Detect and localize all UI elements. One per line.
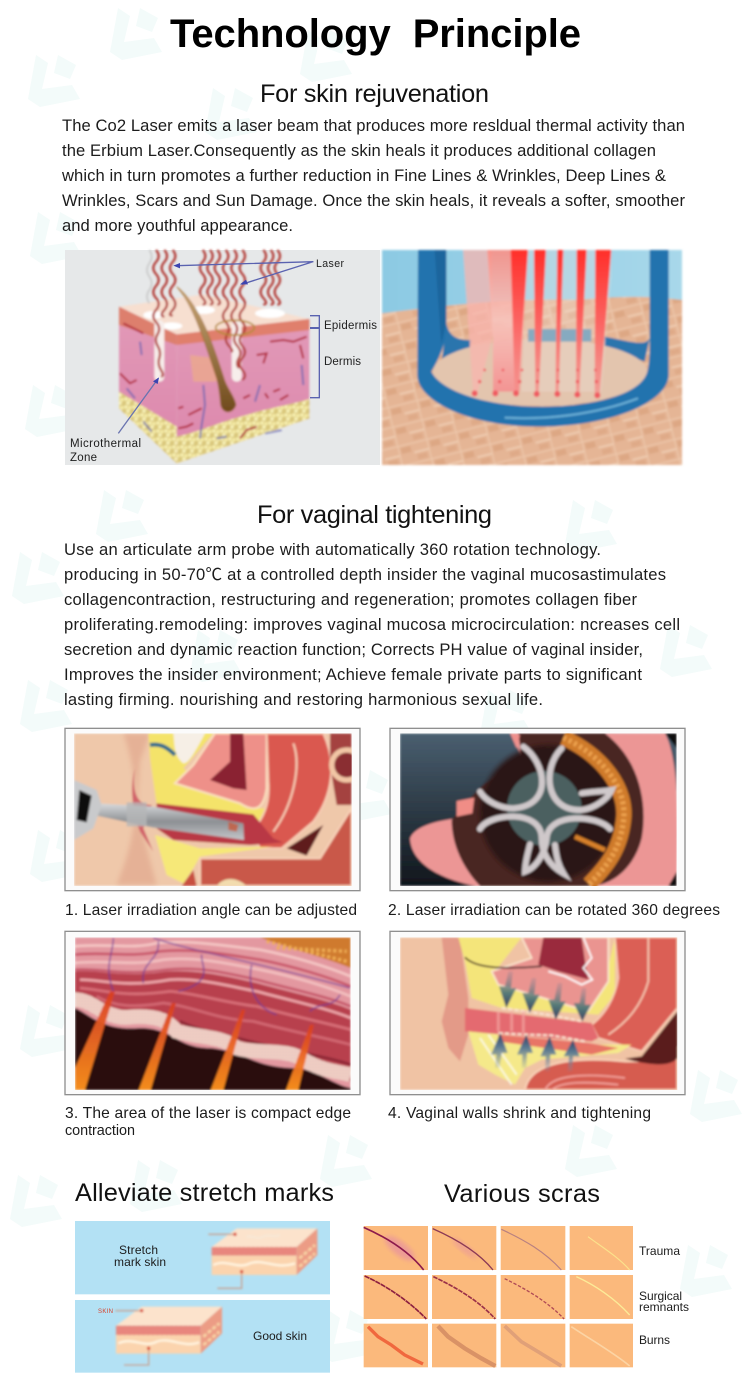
label: stretch mark skin (114, 1243, 166, 1269)
probe (74, 780, 244, 840)
label: stretch mark skin: Stretch (119, 1243, 158, 1257)
text block: vaginal tightening: Use an articulate arm probe with automatically 360 rotation technology. (64, 540, 601, 559)
panel: stretch mark skin comparison (75, 1221, 330, 1373)
skin block (119, 294, 309, 463)
blood vessels (120, 323, 307, 438)
hair follicle (177, 287, 236, 412)
label: dermis: Dermis (324, 356, 361, 368)
trauma scars (364, 1227, 630, 1270)
text block: vaginal tightening (64, 540, 680, 709)
caption 3: 3. The area of the laser is compact edge (65, 1105, 351, 1122)
label: microthermal zone: Zone (70, 452, 97, 464)
stretch mark skin card (75, 1221, 330, 1294)
red beams (511, 250, 611, 395)
label: good skin: Good skin (253, 1329, 307, 1343)
compression arrows (491, 971, 591, 1071)
label: epidermis: Epidermis (324, 320, 377, 332)
label: surgical remnants (639, 1289, 689, 1314)
panel: laser ring over skin (382, 250, 682, 465)
good skin card (75, 1300, 330, 1373)
text block: vaginal tightening: secretion and dynamic reaction function; Corrects PH value of vaginal insider, (64, 640, 643, 659)
panel: skin cross-section diagram (65, 250, 380, 465)
caption 3 (65, 1105, 351, 1139)
text block: vaginal tightening: proliferating.remodeling: improves vaginal mucosa microcirculation: ncreases cell (64, 615, 680, 634)
title: Technology Principle (170, 12, 581, 56)
label: microthermal zone: Microthermal (70, 438, 141, 450)
pale beams (463, 250, 611, 392)
surgical scars (365, 1276, 630, 1319)
text block: skin rejuvenation: the Erbium Laser.Consequently as the skin heals it produces additional collagen (62, 141, 656, 160)
label: laser: Laser (316, 258, 344, 270)
label: trauma: Trauma (639, 1244, 680, 1258)
petals (480, 747, 612, 873)
label: microthermal zone (70, 438, 141, 464)
text block: vaginal tightening: lasting firming. nourishing and restoring harmonious sexual life. (64, 690, 543, 709)
tissue layers (75, 942, 351, 1065)
panel: laser on tissue layers image (65, 931, 360, 1095)
ring (417, 250, 669, 427)
heading: alleviate stretch marks: Alleviate stretch marks (75, 1179, 334, 1207)
burn scars (368, 1326, 630, 1366)
text block: skin rejuvenation: The Co2 Laser emits a laser beam that produces more resldual thermal activity than (62, 116, 685, 135)
text block: vaginal tightening: collagencontraction, restructuring and regeneration; promotes collagen fiber (64, 590, 637, 609)
text block: skin rejuvenation: and more youthful appearance. (62, 216, 293, 235)
label: skin: SKIN (98, 1309, 113, 1315)
label: burns: Burns (639, 1333, 670, 1347)
laser beams (147, 250, 280, 380)
heading: for vaginal tightening: For vaginal tightening (257, 501, 492, 529)
heading: for skin rejuvenation: For skin rejuvenation (260, 80, 489, 108)
text block: skin rejuvenation: Wrinkles, Scars and Sun Damage. Once the skin heals, it reveals a softer, smoother (62, 191, 685, 210)
caption 1: 1. Laser irradiation angle can be adjusted (65, 902, 357, 919)
panel: tightened walls image (390, 931, 685, 1095)
text block: vaginal tightening: producing in 50-70℃ at a controlled depth insider the vaginal mucosastimulates (64, 565, 666, 584)
text block: skin rejuvenation: which in turn promotes a further reduction in Fine Lines & Wrinkles, Deep Lines & (61, 166, 666, 185)
label: surgical remnants: remnants (639, 1300, 689, 1314)
beam spots (472, 369, 600, 398)
caption 3: contraction (65, 1123, 135, 1139)
panel: probe insertion image (65, 728, 362, 891)
text block: vaginal tightening: Improves the insider environment; Achieve female private parts to significant (64, 665, 642, 684)
text block: skin rejuvenation (61, 116, 685, 235)
orange laser beams (75, 991, 314, 1090)
heading: various scras: Various scras (444, 1180, 600, 1208)
panel: scar types grid (364, 1226, 633, 1367)
caption 4: 4. Vaginal walls shrink and tightening (388, 1105, 651, 1122)
label: surgical remnants: Surgical (639, 1289, 682, 1303)
panel: rotating probe image (390, 728, 685, 891)
label: stretch mark skin: mark skin (114, 1255, 166, 1269)
callout arrows and brackets (118, 262, 319, 433)
caption 2: 2. Laser irradiation can be rotated 360 degrees (388, 902, 720, 919)
